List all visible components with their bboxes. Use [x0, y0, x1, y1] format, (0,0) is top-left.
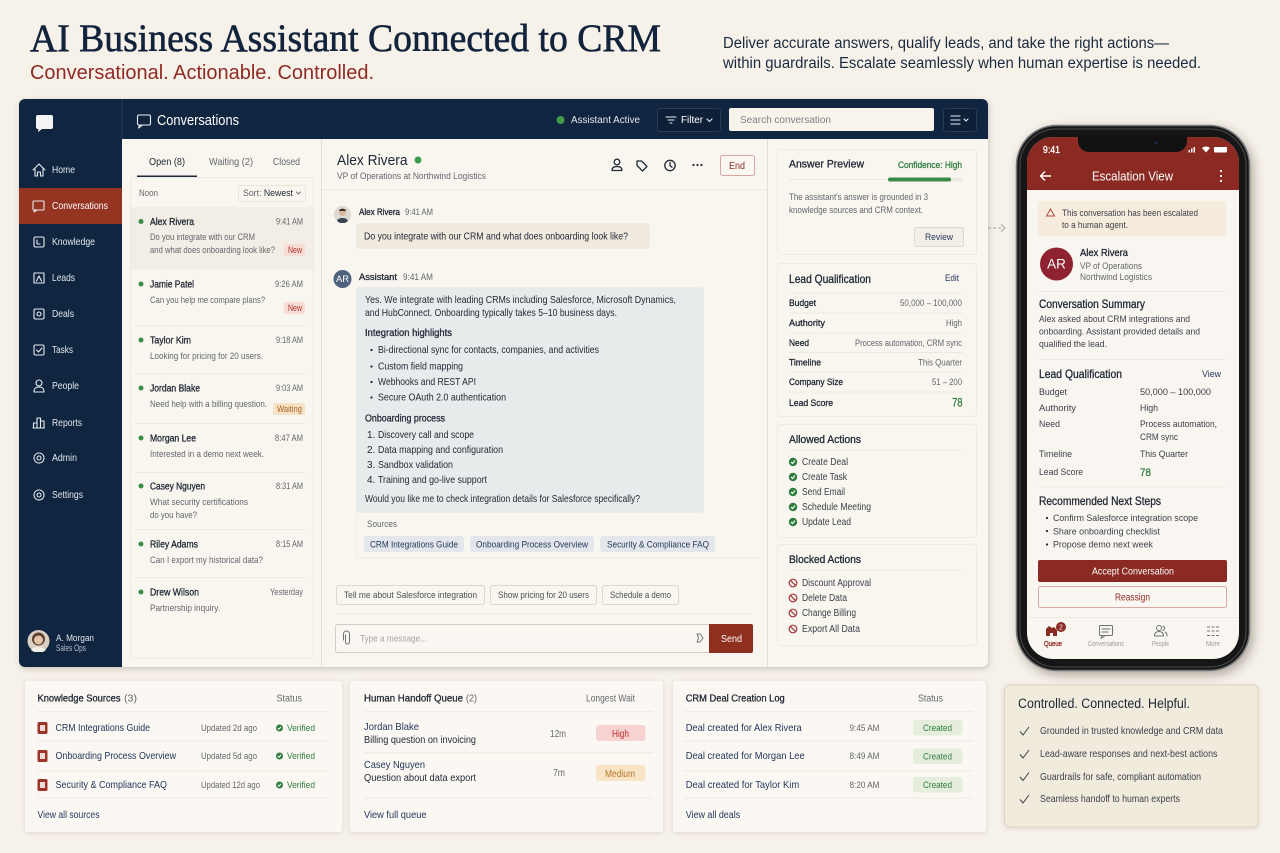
icon: conversations — [138, 115, 150, 128]
list toolbar — [139, 186, 306, 202]
conversation: Riley Adams: 8:15 AM — [276, 538, 303, 549]
tab: people: People — [1152, 641, 1169, 648]
panel: sidebar navigation — [19, 115, 122, 653]
message: Alex Rivera: 9:41 AM — [405, 206, 433, 217]
source row: Security & Compliance FAQ — [38, 779, 315, 791]
icon: back arrow — [1040, 172, 1051, 180]
queue row: Casey Nguyen: Casey Nguyen — [364, 759, 425, 771]
conversation: Jordan Blake: Waiting — [277, 404, 302, 414]
panel: CRM deal creation log: View all deals — [686, 810, 740, 821]
button: accept conversation — [1038, 560, 1227, 582]
user profile: Sales Ops — [56, 643, 86, 653]
phone lead qualification: Lead Qualification — [1039, 367, 1122, 381]
button: reassign: Reassign — [1115, 592, 1150, 604]
message: Assistant answer: Secure OAuth 2.0 authentication — [378, 392, 506, 404]
tab bar — [1044, 622, 1220, 648]
search box — [729, 108, 934, 131]
tagline — [722, 35, 1201, 72]
button: accept conversation: Accept Conversation — [1092, 566, 1174, 578]
panel: right sidebar — [778, 150, 976, 646]
chat header: VP of Operations at Northwind Logistics — [337, 170, 486, 181]
tab: queue: 2 — [1059, 624, 1063, 632]
conversation: Jamie Patel: Can you help me compare plans? — [150, 294, 265, 305]
conversation: Jamie Patel: 9:26 AM — [275, 278, 303, 289]
phone screen — [1027, 137, 1239, 659]
recommended next steps: Propose demo next week — [1053, 538, 1153, 550]
message: Assistant answer: Sandbox validation — [378, 459, 453, 471]
contact card: Alex Rivera — [1080, 247, 1128, 259]
phone body — [1016, 126, 1250, 670]
log row: Morgan Lee: Deal created for Morgan Lee — [686, 750, 805, 762]
phone lead qualification: This Quarter — [1140, 448, 1188, 459]
active nav highlight — [19, 188, 122, 224]
filter button — [658, 108, 720, 132]
source row: Onboarding Process Overview — [38, 750, 315, 762]
phone notch — [1078, 135, 1187, 152]
suggested replies: Schedule a demo — [610, 589, 671, 600]
nav: Deals — [34, 308, 74, 320]
arrow: to phone escalation view — [988, 224, 1005, 232]
user profile: A. Morgan — [56, 632, 94, 643]
panel: chat thread — [322, 152, 767, 653]
message: Assistant answer: 9:41 AM — [403, 271, 433, 282]
conversation: Taylor Kim — [138, 334, 303, 361]
title: AI Business Assistant Connected to CRM — [30, 17, 661, 60]
panel: human handoff queue: Longest Wait — [586, 694, 635, 704]
button: reassign — [1038, 586, 1226, 608]
conversation: Riley Adams — [138, 538, 303, 565]
card: answer preview: The assistant's answer is grounded in 3 — [789, 191, 928, 202]
card: answer preview: knowledge sources and CRM context. — [789, 204, 923, 215]
tab: people — [1152, 626, 1169, 648]
log row: Taylor Kim — [686, 777, 962, 792]
source row: Onboarding Process Overview: Verified — [287, 750, 315, 761]
conversation: Alex Rivera: Do you integrate with our CRM — [150, 231, 255, 242]
recommended next steps: Recommended Next Steps — [1039, 494, 1161, 508]
nav: Leads: Leads — [52, 272, 75, 284]
conversation: Casey Nguyen: 8:31 AM — [276, 480, 303, 491]
card: lead qualification: Company Size — [789, 376, 843, 387]
conversation: Taylor Kim: 9:18 AM — [276, 334, 303, 345]
card: lead qualification: Lead Score — [789, 397, 833, 408]
queue row: Casey Nguyen: Question about data export — [364, 773, 476, 784]
status: assistant active: Assistant Active — [571, 114, 640, 126]
source row: CRM Integrations Guide — [38, 722, 315, 734]
callout: controlled connected helpful: Guardrails for safe, compliant automation — [1040, 771, 1201, 783]
message: Assistant answer: and HubConnect. Onboarding typically takes 5–10 business days. — [365, 307, 617, 319]
panel: knowledge sources: Status — [276, 694, 302, 704]
source row: Security & Compliance FAQ: Updated 12d ago — [201, 779, 260, 790]
card: lead qualification: Process automation, CRM sync — [855, 337, 962, 348]
conversation: Alex Rivera: and what does onboarding look like? — [150, 244, 275, 255]
message input — [336, 624, 753, 653]
phone frame edge — [1020, 129, 1246, 667]
message: Assistant answer: Assistant — [359, 271, 397, 282]
sources: Security & Compliance FAQ — [607, 538, 709, 550]
panel: CRM deal creation log: Status — [918, 694, 943, 704]
card: lead qualification: Need — [789, 337, 809, 348]
phone lead qualification: Budget — [1039, 386, 1067, 397]
nav: Home — [33, 164, 75, 176]
message: Assistant answer: Would you like me to check integration details for Salesforce specifically? — [365, 493, 640, 505]
conversation: Drew Wilson: Partnership inquiry. — [150, 602, 220, 613]
send button — [709, 624, 753, 653]
phone lead qualification: 78 — [1140, 467, 1151, 479]
message: Assistant answer: 4. — [367, 475, 375, 486]
suggested replies: Tell me about Salesforce integration — [344, 589, 477, 600]
sources: Sources — [367, 518, 397, 529]
panel: knowledge sources — [25, 681, 342, 832]
queue row: Casey Nguyen: 7m — [553, 768, 565, 779]
icon: app chat logo — [36, 115, 53, 132]
card: blocked actions: Blocked Actions — [789, 554, 861, 566]
phone header — [1027, 137, 1239, 190]
send button: Send — [721, 633, 742, 645]
chat header — [322, 152, 767, 190]
queue row: Jordan Blake: High — [612, 729, 629, 740]
conversation summary: qualified the lead. — [1039, 338, 1107, 349]
conversation: Jordan Blake: Jordan Blake — [150, 384, 200, 394]
queue row: Jordan Blake — [364, 721, 646, 746]
card: blocked actions: Change Billing — [802, 608, 856, 619]
nav: Admin: Admin — [52, 452, 77, 464]
panel: desktop app window — [19, 99, 988, 667]
conversation summary: Alex asked about CRM integrations and — [1039, 313, 1190, 324]
panel: human handoff queue — [350, 681, 663, 832]
card: answer preview: Answer Preview — [789, 158, 864, 170]
phone lead qualification: Lead Score — [1039, 466, 1083, 477]
conversation: Jamie Patel: Jamie Patel — [150, 280, 194, 290]
card: lead qualification: 50,000 – 100,000 — [900, 297, 962, 308]
message: Assistant answer: Custom field mapping — [378, 360, 463, 372]
panel: human handoff queue: View full queue — [364, 810, 427, 821]
end button: End — [729, 160, 745, 172]
phone lead qualification — [1039, 367, 1221, 479]
suggested replies: Show pricing for 20 users — [498, 589, 589, 600]
conversation: Alex Rivera: 9:41 AM — [276, 216, 303, 226]
callout: controlled connected helpful: Grounded in trusted knowledge and CRM data — [1040, 725, 1223, 737]
conversation: Alex Rivera: Alex Rivera — [150, 217, 194, 228]
phone lead qualification: View — [1202, 368, 1221, 379]
phone header: 9:41 — [1043, 145, 1060, 156]
sources: CRM Integrations Guide — [370, 538, 458, 550]
recommended next steps: Share onboarding checklist — [1053, 526, 1160, 536]
nav: Leads — [34, 272, 75, 284]
icon: tag — [637, 161, 647, 171]
queue row: Jordan Blake: 12m — [550, 729, 566, 740]
message: Assistant answer: AR — [336, 273, 349, 284]
log row: Morgan Lee — [686, 748, 962, 764]
source row: CRM Integrations Guide: Verified — [287, 722, 315, 733]
nav: Knowledge — [34, 236, 95, 248]
queue row: Jordan Blake: Billing question on invoicing — [364, 735, 476, 746]
source row: CRM Integrations Guide: Updated 2d ago — [201, 722, 257, 733]
conversation: Jamie Patel: New — [288, 303, 303, 313]
conversation: Jordan Blake: Need help with a billing question. — [150, 398, 267, 409]
queue row: Casey Nguyen: Medium — [605, 769, 635, 780]
filter button: Filter — [681, 114, 703, 126]
alert banner: This conversation has been escalated — [1062, 207, 1198, 218]
conversation: Alex Rivera: New — [288, 245, 303, 255]
source row: Onboarding Process Overview: Updated 5d ago — [201, 750, 257, 761]
contact card: VP of Operations — [1080, 260, 1142, 271]
callout: controlled connected helpful — [1004, 685, 1258, 827]
message: Assistant answer: 2. — [367, 445, 375, 456]
card: allowed actions: Create Task — [802, 472, 848, 483]
tab: more: More — [1206, 641, 1220, 648]
contact card: Northwind Logistics — [1080, 271, 1152, 282]
nav: Reports: Reports — [52, 417, 82, 429]
log row: Morgan Lee: Created — [923, 750, 952, 762]
card: lead qualification: Budget — [789, 297, 816, 308]
icon: more — [692, 164, 703, 166]
sources — [356, 513, 760, 558]
panel: CRM deal creation log: CRM Deal Creation Log — [686, 692, 785, 704]
conversation: Casey Nguyen: What security certifications — [150, 496, 248, 507]
log row: Taylor Kim: 8:20 AM — [850, 779, 880, 790]
panel: phone escalation view — [1016, 126, 1250, 670]
callout: controlled connected helpful: Lead-aware responses and next-best actions — [1040, 748, 1218, 760]
nav: Settings — [34, 489, 83, 501]
top bar — [138, 108, 976, 132]
panel: CRM deal creation log — [673, 681, 986, 832]
message: Assistant answer: Onboarding process — [365, 412, 445, 424]
message: Assistant answer: Webhooks and REST API — [378, 376, 476, 388]
card: answer preview — [778, 150, 976, 254]
search box: Search conversation — [740, 114, 831, 126]
message: Alex Rivera: Alex Rivera — [359, 206, 401, 217]
log row: Alex Rivera: 9:45 AM — [850, 722, 880, 733]
phone lead qualification: Need — [1039, 418, 1060, 429]
conversation: Taylor Kim: Taylor Kim — [150, 336, 191, 346]
message: Assistant answer: Integration highlights — [365, 327, 452, 339]
card: allowed actions — [778, 424, 976, 538]
log row: Taylor Kim: Created — [923, 779, 952, 790]
nav: Conversations: Conversations — [52, 200, 108, 212]
card: allowed actions: Schedule Meeting — [802, 502, 871, 513]
message: Assistant answer: Discovery call and scope — [378, 429, 474, 441]
message: Assistant answer: 1. — [367, 430, 375, 441]
card: lead qualification: Timeline — [789, 356, 821, 368]
source row: Onboarding Process Overview: Onboarding Process Overview — [56, 750, 176, 762]
queue row: Jordan Blake: Jordan Blake — [364, 721, 419, 733]
tabs: Closed — [273, 156, 300, 168]
phone header: Escalation View — [1092, 170, 1174, 184]
card: allowed actions: Create Deal — [802, 457, 848, 468]
panel: conversation list — [130, 156, 314, 658]
user profile — [28, 630, 94, 653]
card: lead qualification: This Quarter — [918, 356, 962, 368]
card: lead qualification: Edit — [945, 272, 959, 283]
card: blocked actions: Discount Approval — [802, 578, 871, 589]
card: allowed actions: Update Lead — [802, 517, 851, 528]
icon: history — [665, 160, 675, 171]
conversation: Casey Nguyen: Casey Nguyen — [150, 482, 205, 492]
conversation: Casey Nguyen: do you have? — [150, 509, 197, 520]
card: lead qualification: Authority — [789, 317, 825, 328]
nav: Admin — [34, 452, 77, 464]
log row: Alex Rivera — [686, 720, 962, 736]
conversation: Morgan Lee: Morgan Lee — [150, 434, 196, 444]
conversation: Drew Wilson: Yesterday — [270, 586, 303, 597]
alert banner — [1038, 201, 1226, 236]
subtitle: Conversational. Actionable. Controlled. — [30, 62, 374, 84]
tab: queue — [1044, 622, 1066, 648]
tabs: Waiting (2) — [209, 156, 253, 168]
alert banner: to a human agent. — [1062, 219, 1128, 230]
conversation: Morgan Lee: 8:47 AM — [275, 432, 303, 443]
conversation: Casey Nguyen — [138, 480, 303, 520]
recommended next steps: Confirm Salesforce integration scope — [1053, 512, 1198, 523]
list toolbar: Noon — [139, 187, 158, 198]
nav: People — [34, 380, 79, 392]
message: Assistant answer — [334, 270, 704, 513]
recommended next steps — [1039, 494, 1198, 550]
card: allowed actions: Allowed Actions — [789, 434, 861, 446]
phone lead qualification: High — [1140, 402, 1158, 413]
conversation: Jamie Patel — [138, 278, 305, 314]
suggested replies — [336, 586, 678, 604]
tab: conversations: Conversations — [1088, 641, 1124, 648]
message input: Type a message... — [360, 632, 427, 644]
conversation: Jordan Blake — [138, 382, 305, 415]
icon: contact — [612, 159, 622, 170]
conversation: Jordan Blake: 9:03 AM — [276, 382, 303, 393]
conversation: Alex Rivera — [131, 207, 313, 270]
card: blocked actions: Delete Data — [802, 593, 847, 604]
card: lead qualification: 78 — [952, 396, 963, 410]
end button — [720, 156, 754, 176]
sources: Onboarding Process Overview — [476, 538, 588, 550]
contact card: AR — [1047, 256, 1066, 272]
panel: knowledge sources: Knowledge Sources — [38, 692, 120, 704]
phone lead qualification: Authority — [1039, 402, 1076, 413]
list toolbar: Sort: Newest — [243, 187, 293, 198]
log row: Morgan Lee: 8:49 AM — [850, 750, 880, 761]
phone lead qualification: Process automation, — [1140, 418, 1217, 429]
phone lead qualification: Timeline — [1039, 448, 1072, 459]
nav: Tasks: Tasks — [52, 344, 73, 356]
chat header: Alex Rivera — [337, 152, 408, 169]
tagline: Deliver accurate answers, qualify leads, and take the right actions— — [723, 35, 1169, 52]
log row: Alex Rivera: Deal created for Alex Rivera — [686, 722, 802, 734]
contact card — [1040, 247, 1152, 282]
menu button — [944, 108, 976, 132]
message: Assistant answer: Yes. We integrate with leading CRMs including Salesforce, Microsoft Dynamics, — [365, 294, 676, 306]
card: lead qualification: High — [946, 317, 962, 328]
conversation: Riley Adams: Can I export my historical data? — [150, 554, 263, 565]
card: lead qualification: Lead Qualification — [789, 272, 871, 286]
panel: knowledge sources: (3) — [124, 692, 137, 704]
card: answer preview: Review — [925, 231, 953, 242]
source row: CRM Integrations Guide: CRM Integrations Guide — [56, 722, 150, 734]
nav: Conversations — [33, 200, 108, 212]
source row: Security & Compliance FAQ: Security & Compliance FAQ — [56, 779, 167, 791]
card: blocked actions — [778, 544, 976, 646]
nav: Tasks — [34, 344, 73, 356]
log row: Alex Rivera: Created — [923, 722, 952, 733]
phone lead qualification: CRM sync — [1140, 431, 1178, 442]
panel: knowledge sources: View all sources — [38, 810, 100, 821]
message: Assistant answer: Training and go-live support — [378, 474, 487, 486]
message: Assistant answer: Bi-directional sync for contacts, companies, and activities — [378, 344, 599, 356]
callout: controlled connected helpful: Seamless handoff to human experts — [1040, 793, 1180, 805]
panel: human handoff queue: Human Handoff Queue — [364, 692, 463, 704]
callout: controlled connected helpful: Controlled. Connected. Helpful. — [1018, 696, 1190, 711]
tabs: Open (8) — [149, 156, 185, 168]
nav: Reports — [33, 417, 82, 429]
conversation summary: onboarding. Assistant provided details and — [1039, 326, 1200, 336]
icon: overflow menu — [1220, 170, 1222, 182]
queue row: Casey Nguyen — [364, 759, 646, 784]
conversation: Drew Wilson — [138, 586, 303, 613]
card: answer preview: Confidence: High — [898, 159, 962, 170]
phone lead qualification: 50,000 – 100,000 — [1140, 386, 1211, 397]
tabs — [137, 156, 300, 177]
conversation: Morgan Lee: Interested in a demo next week. — [150, 448, 264, 459]
card: allowed actions: Send Email — [802, 487, 845, 498]
tagline: within guardrails. Escalate seamlessly when human expertise is needed. — [722, 55, 1201, 72]
nav: Settings: Settings — [52, 489, 83, 501]
log row: Taylor Kim: Deal created for Taylor Kim — [686, 779, 799, 791]
card: blocked actions: Export All Data — [802, 624, 860, 635]
message: Alex Rivera: Do you integrate with our CRM and what does onboarding look like? — [364, 230, 628, 242]
conversation: Morgan Lee — [138, 432, 303, 459]
tab: more — [1206, 626, 1220, 646]
conversation: Taylor Kim: Looking for pricing for 20 users. — [150, 350, 263, 361]
panel: human handoff queue: (2) — [466, 692, 477, 704]
card: lead qualification: 51 – 200 — [932, 376, 962, 387]
message: Alex Rivera — [334, 206, 650, 249]
conversation: Riley Adams: Riley Adams — [150, 540, 198, 550]
message: Assistant answer: Data mapping and configuration — [378, 444, 503, 456]
conversation summary — [1039, 297, 1200, 349]
nav: People: People — [52, 380, 79, 392]
conversation: Drew Wilson: Drew Wilson — [150, 588, 199, 598]
heading: Conversations: Conversations — [157, 112, 239, 129]
nav: Knowledge: Knowledge — [52, 236, 95, 248]
card: lead qualification — [778, 264, 976, 416]
tab: queue: Queue — [1044, 641, 1062, 648]
source row: Security & Compliance FAQ: Verified — [287, 779, 315, 790]
message: Assistant answer: 3. — [367, 460, 375, 471]
nav: Deals: Deals — [52, 308, 74, 320]
nav: Home: Home — [52, 164, 75, 176]
conversation summary: Conversation Summary — [1039, 297, 1145, 311]
tab: conversations — [1088, 626, 1124, 648]
status icons — [1188, 146, 1227, 152]
